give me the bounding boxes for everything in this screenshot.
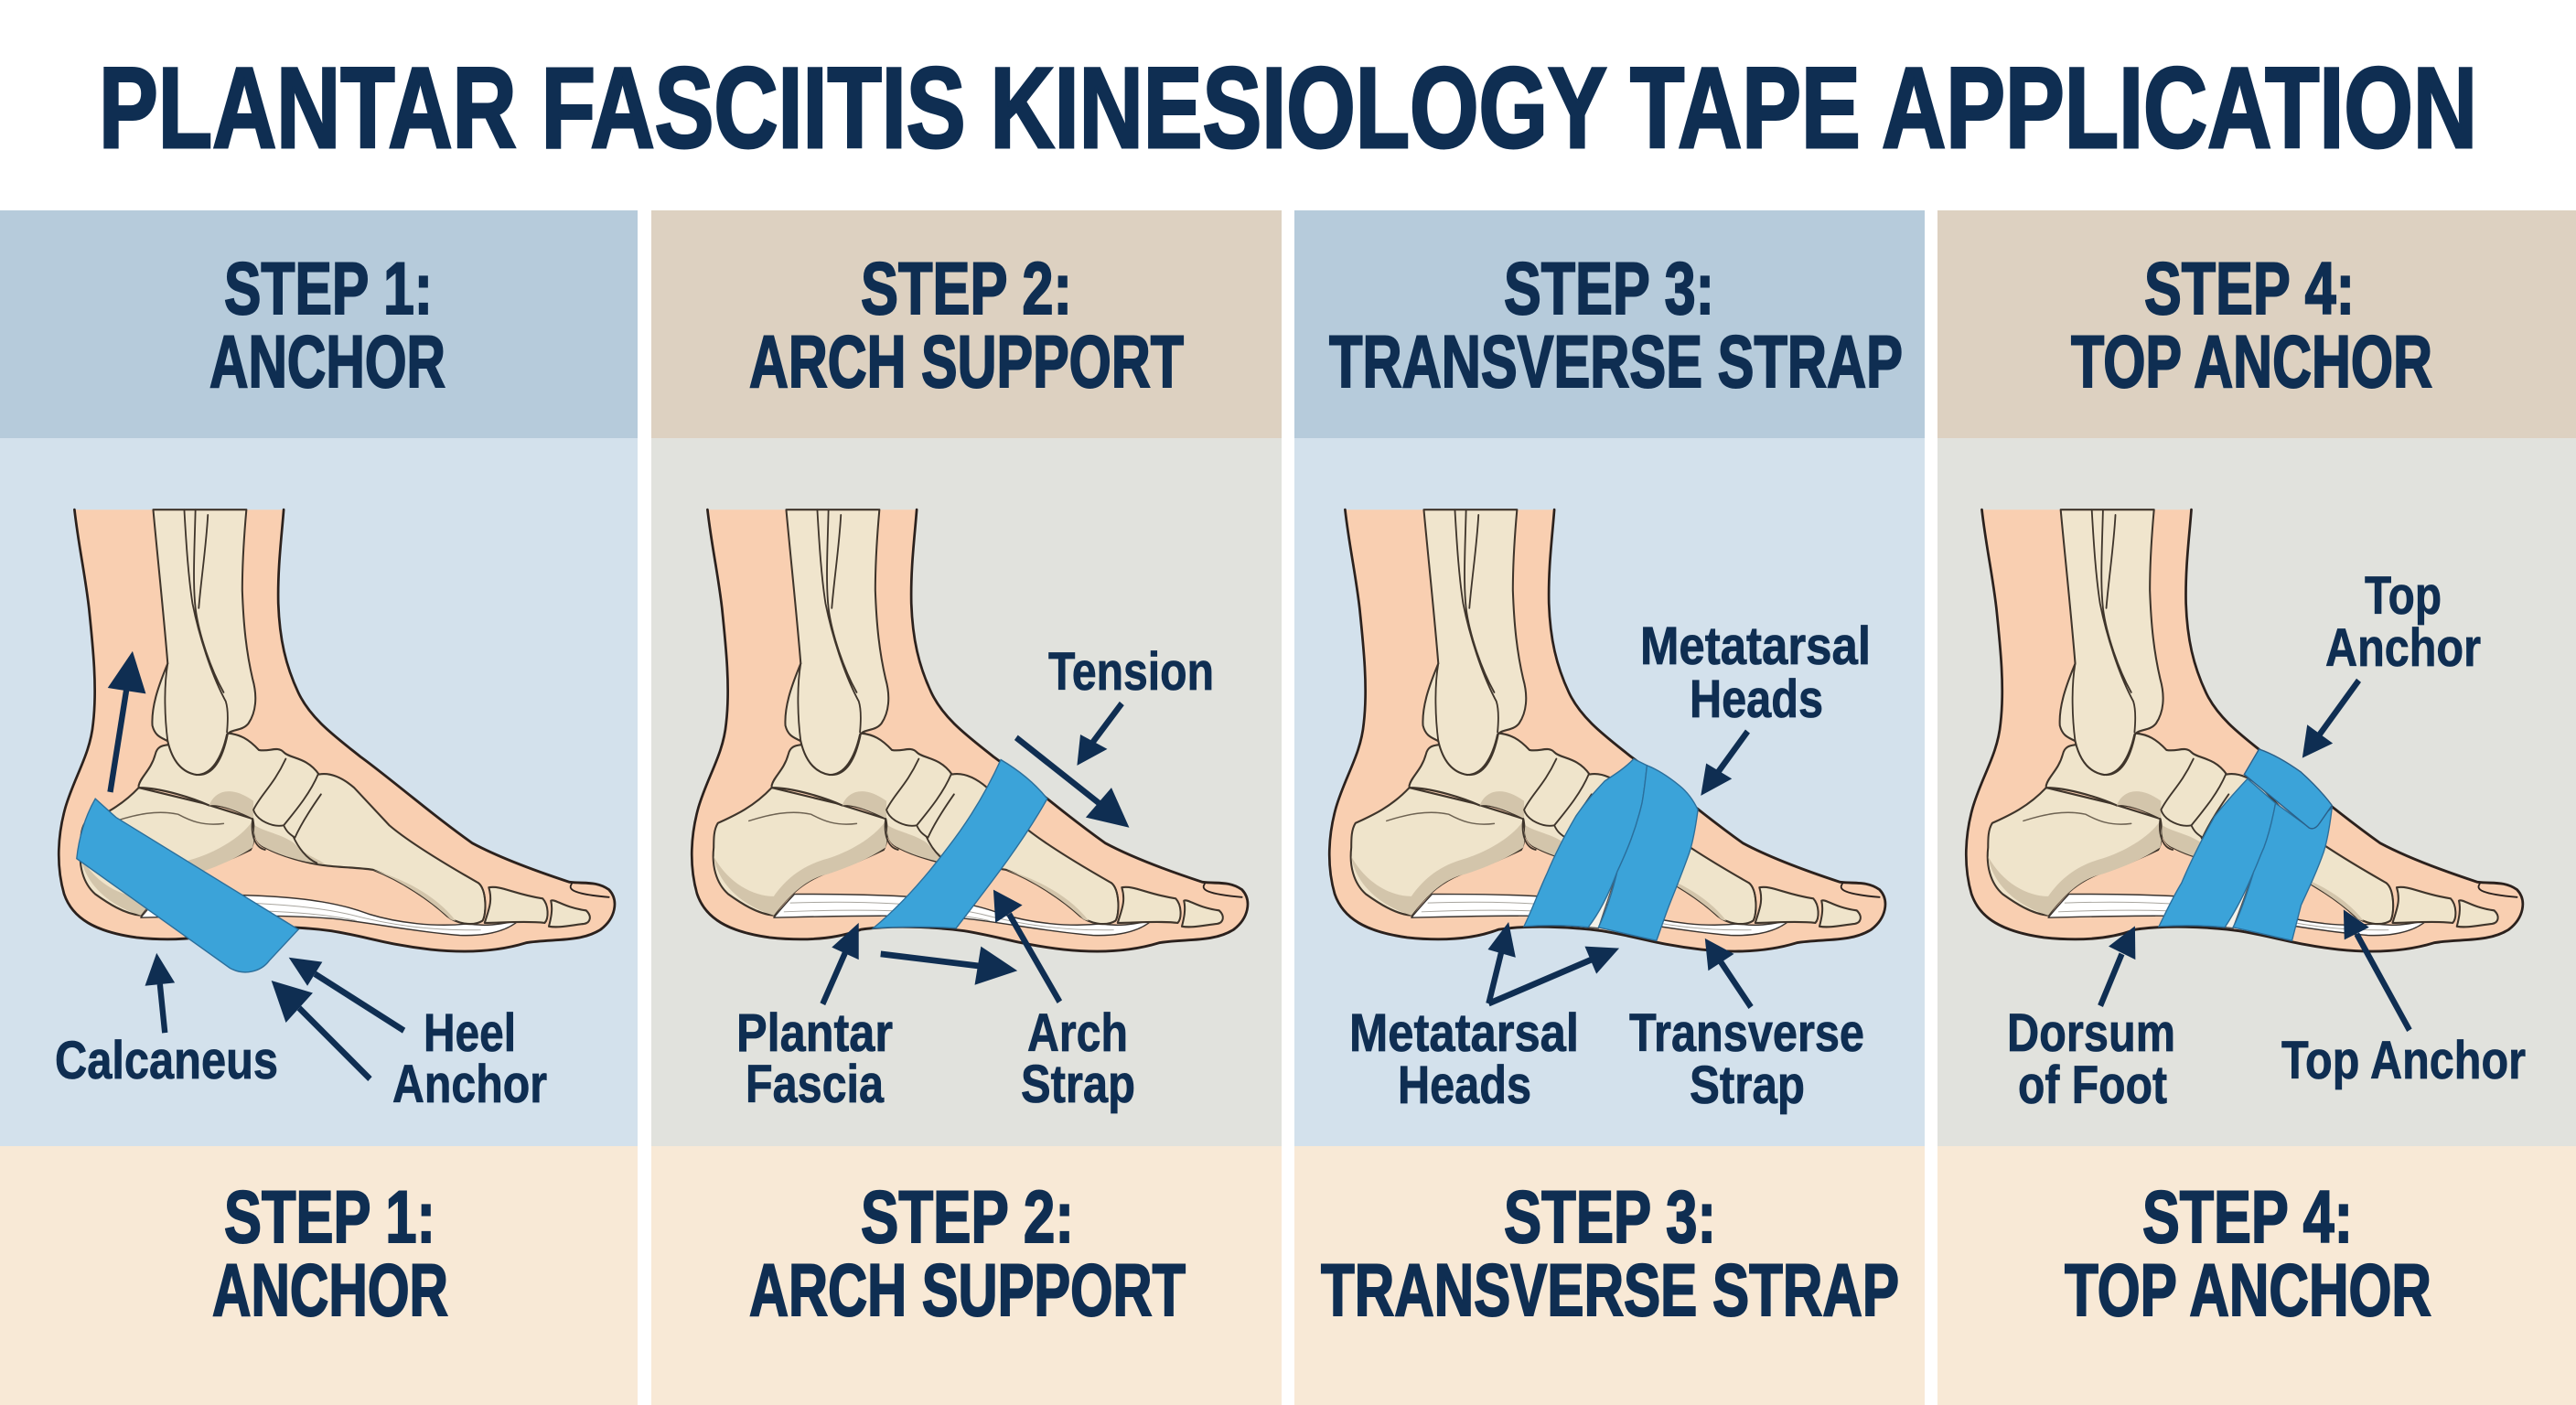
step 1 header: STEP 1: xyxy=(224,248,433,330)
step 1 header: ANCHOR xyxy=(209,321,445,403)
step 4 labels: Anchor xyxy=(2325,618,2481,678)
step 4 labels: Top xyxy=(2365,566,2442,626)
step 3 labels: Heads xyxy=(1398,1056,1531,1115)
step 3 labels: Strap xyxy=(1690,1056,1805,1115)
step 1 labels: Heel xyxy=(424,1003,516,1063)
step 1 labels xyxy=(55,1003,547,1114)
step 2 illustration background xyxy=(651,438,1282,1146)
step 3 header: TRANSVERSE STRAP xyxy=(1329,321,1903,403)
step 3 illustration background xyxy=(1294,438,1925,1146)
blue transverse strap tape xyxy=(1524,759,1698,940)
step 2 header: ARCH SUPPORT xyxy=(749,321,1184,403)
blue arch strap tape xyxy=(874,760,1047,928)
step 3 labels: Transverse xyxy=(1629,1003,1864,1063)
step 4 labels: of Foot xyxy=(2018,1056,2167,1115)
step 1 footer: STEP 1: xyxy=(224,1176,435,1259)
panel: step 4 xyxy=(1937,210,2576,1405)
step 2 arrows xyxy=(822,703,1129,1004)
step 3 footer: TRANSVERSE STRAP xyxy=(1321,1249,1899,1332)
step 4 header: TOP ANCHOR xyxy=(2071,321,2432,403)
step 4 footer: STEP 4: xyxy=(2142,1176,2353,1259)
step 2 labels: Fascia xyxy=(746,1055,885,1114)
step 4 footer: TOP ANCHOR xyxy=(2065,1249,2431,1332)
step 2 labels: Tension xyxy=(1048,642,1214,702)
step 4 illustration background xyxy=(1937,438,2576,1146)
step 3 header xyxy=(1294,210,1925,438)
step 4 header xyxy=(1937,210,2576,438)
step 2 labels: Strap xyxy=(1021,1055,1135,1114)
step 3 labels: Metatarsal xyxy=(1349,1003,1579,1063)
panel: step 1 xyxy=(0,210,638,1405)
step 3 footer xyxy=(1294,1146,1925,1405)
blue straps with top anchor tape xyxy=(2159,749,2332,940)
step 3 labels xyxy=(1349,617,1871,1115)
foot with dorsum anatomy, step 4 xyxy=(1966,509,2523,951)
step 1 illustration background xyxy=(0,438,638,1146)
step 2 labels: Arch xyxy=(1027,1003,1128,1063)
foot with heel anatomy, step 1 xyxy=(59,509,615,951)
panel: step 2 xyxy=(651,210,1282,1405)
step 4 arrows xyxy=(2100,681,2410,1030)
step 2 footer xyxy=(651,1146,1282,1405)
step 1 footer: ANCHOR xyxy=(212,1249,448,1332)
step 4 labels xyxy=(2007,566,2526,1115)
step 3 footer: STEP 3: xyxy=(1504,1176,1716,1259)
step 3 arrows xyxy=(1487,732,1751,1007)
step 1 header xyxy=(0,210,638,438)
step 4 header: STEP 4: xyxy=(2144,248,2355,330)
step 3 labels: Metatarsal xyxy=(1640,617,1871,676)
step 1 arrows xyxy=(108,651,404,1079)
foot with arch anatomy, step 2 xyxy=(692,509,1248,951)
foot with metatarsal anatomy, step 3 xyxy=(1329,509,1885,951)
step 1 footer xyxy=(0,1146,638,1405)
step 2 footer: STEP 2: xyxy=(861,1176,1074,1259)
step 2 footer: ARCH SUPPORT xyxy=(749,1249,1186,1332)
step 4 labels: Dorsum xyxy=(2007,1003,2175,1063)
step 1 labels: Calcaneus xyxy=(55,1031,278,1090)
step 2 labels: Plantar xyxy=(736,1003,893,1063)
step 1 labels: Anchor xyxy=(392,1055,547,1114)
step 4 footer xyxy=(1937,1146,2576,1405)
step 3 labels: Heads xyxy=(1690,670,1823,729)
step 2 header: STEP 2: xyxy=(861,248,1072,330)
blue heel anchor tape xyxy=(77,799,298,972)
panel: step 3 xyxy=(1294,210,1925,1405)
step 2 header xyxy=(651,210,1282,438)
step 3 header: STEP 3: xyxy=(1504,248,1714,330)
step 4 labels: Top Anchor xyxy=(2281,1031,2526,1090)
step 2 labels xyxy=(736,642,1214,1114)
